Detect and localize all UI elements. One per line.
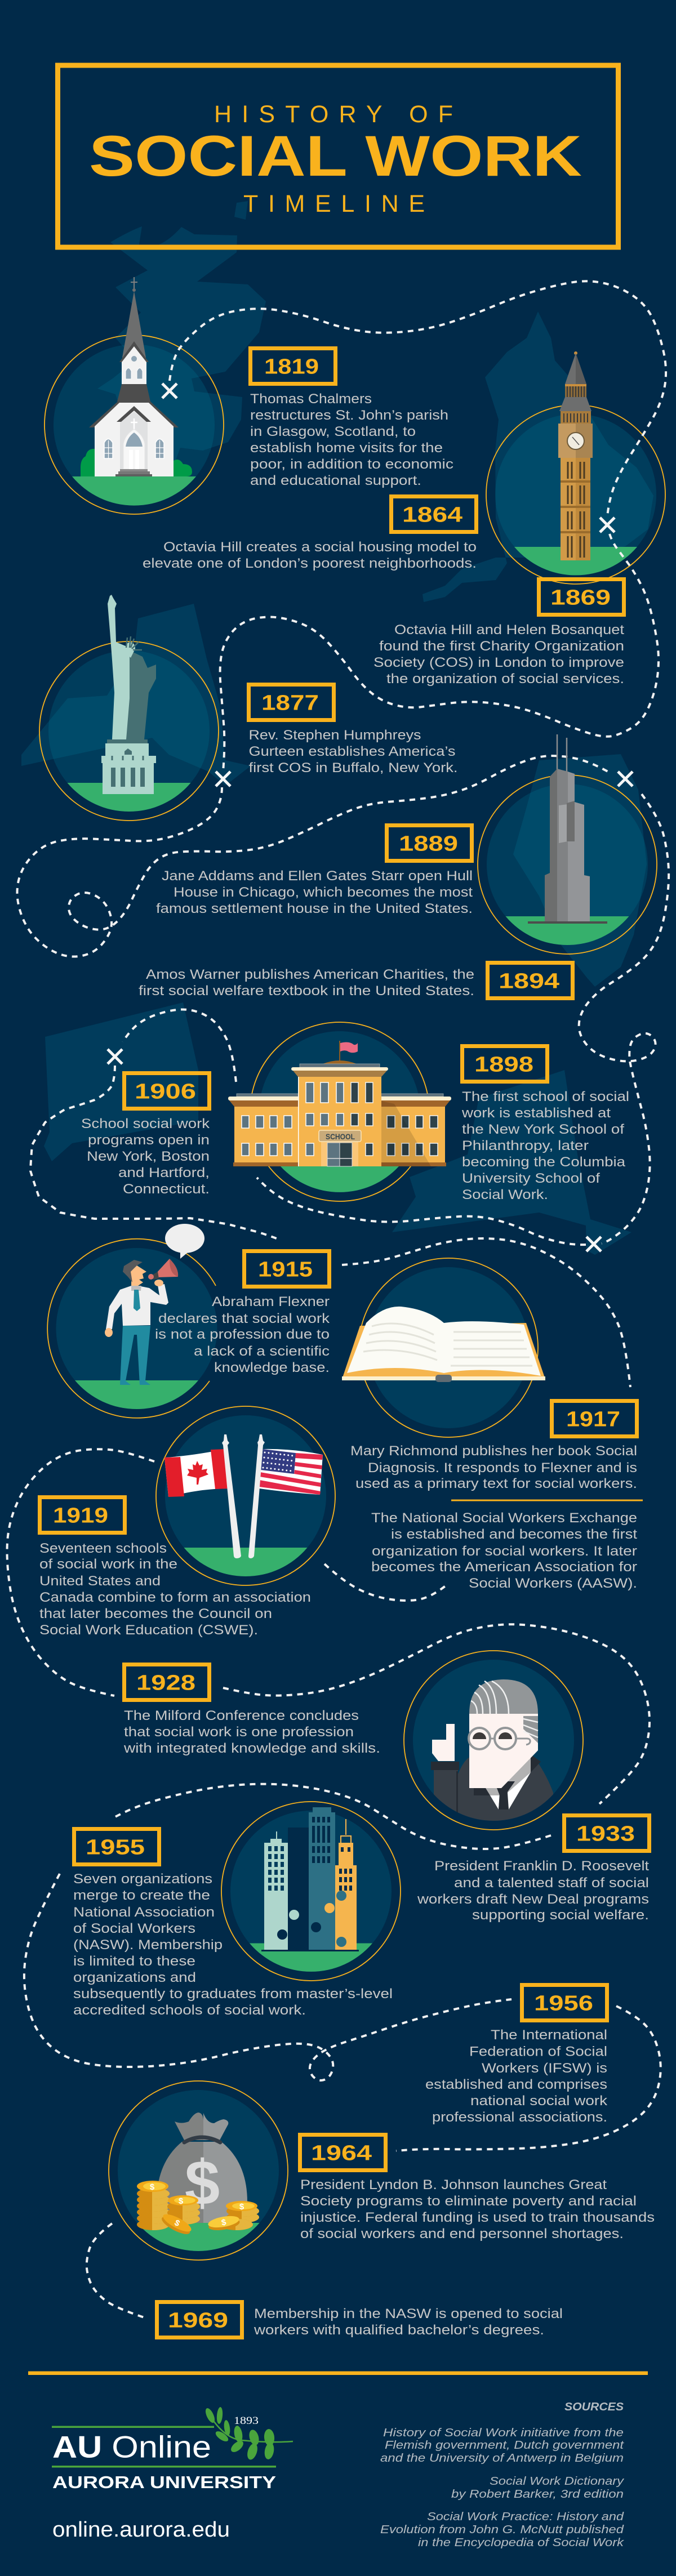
sources: and the University of Antwerp in Belgium <box>380 2452 624 2464</box>
icon: willis tower <box>528 734 607 924</box>
sources <box>380 2401 625 2549</box>
year badge 1928 <box>124 1665 210 1700</box>
year badge 1964 <box>300 2134 385 2171</box>
text 1955: is limited to these <box>73 1954 195 1969</box>
text 1819 <box>250 391 453 488</box>
title box: TIMELINE <box>243 190 425 217</box>
text 1933: and a talented staff of social <box>454 1875 649 1891</box>
text 1894: Amos Warner publishes American Charities, the <box>146 967 474 982</box>
text exchange: becomes the American Association for <box>371 1559 637 1575</box>
text 1915: is not a profession due to <box>155 1327 330 1342</box>
text 1928: The Milford Conference concludes <box>124 1708 359 1723</box>
year badge 1969 <box>157 2302 242 2337</box>
footer logo: 1893 <box>234 2415 259 2427</box>
text 1969: Membership in the NASW is opened to social <box>254 2306 563 2321</box>
icon: church <box>81 277 192 476</box>
text 1915: declares that social work <box>158 1311 330 1326</box>
year badge 1955: 1955 <box>86 1836 145 1860</box>
text 1869: the organization of social services. <box>386 671 624 687</box>
year badge 1889 <box>386 826 472 861</box>
year badge 1894: 1894 <box>499 970 559 993</box>
text 1898: the New York School of <box>462 1122 624 1137</box>
icon: man with megaphone <box>105 1224 204 1385</box>
text 1919: Social Work Education (CSWE). <box>39 1623 258 1638</box>
text 1819: in Glasgow, Scotland, to <box>250 424 416 439</box>
text 1915: knowledge base. <box>214 1360 330 1375</box>
text 1964: President Lyndon B. Johnson launches Great <box>300 2177 607 2192</box>
sources: Social Work Practice: History and <box>427 2511 624 2523</box>
footer logo: AU Online <box>52 2430 211 2464</box>
footer logo: AURORA UNIVERSITY <box>52 2472 276 2492</box>
timeline 1964 <box>300 2134 655 2241</box>
year badge 1864 <box>391 497 477 532</box>
text 1906: New York, Boston <box>87 1149 210 1164</box>
sources: Evolution from John G. McNutt published <box>380 2524 624 2536</box>
text 1894 <box>139 967 474 999</box>
text 1898: becoming the Columbia <box>462 1155 626 1170</box>
text 1877 <box>249 728 457 776</box>
footer logo <box>52 2407 293 2492</box>
text 1877: Rev. Stephen Humphreys <box>249 728 421 743</box>
year badge 1915 <box>244 1251 329 1286</box>
text 1877: first COS in Buffalo, New York. <box>249 760 457 776</box>
icon: money bag and coins <box>137 2113 259 2238</box>
sources: History of Social Work initiative from the <box>383 2427 624 2439</box>
text 1819: poor, in addition to economic <box>250 457 453 472</box>
title box: SOCIAL WORK <box>89 124 582 188</box>
text 1928 <box>123 1708 380 1756</box>
text 1969: workers with qualified bachelor’s degrees. <box>254 2323 544 2338</box>
year badge 1919: 1919 <box>53 1504 108 1527</box>
text 1933 <box>417 1859 649 1923</box>
text 1819: and educational support. <box>250 473 421 488</box>
timeline 1955 <box>73 1829 393 2018</box>
year badge 1917 <box>552 1401 637 1436</box>
year badge 1889: 1889 <box>399 832 458 856</box>
text 1956: Workers (IFSW) is <box>482 2061 607 2076</box>
icon: puzzle skyline <box>261 1807 359 1951</box>
divider 1917 <box>451 1499 643 1501</box>
text 1919: that later becomes the Council on <box>39 1606 272 1621</box>
text 1898: Philanthropy, later <box>462 1138 589 1153</box>
text 1955: accredited schools of social work. <box>73 2003 306 2018</box>
title box <box>57 65 619 247</box>
year badge 1928: 1928 <box>136 1672 195 1695</box>
text 1819: establish home visits for the <box>250 440 443 456</box>
timeline 1869 <box>373 579 624 687</box>
year badge 1906 <box>124 1073 210 1108</box>
text 1869: found the first Charity Organization <box>379 639 624 654</box>
text 1955: National Association <box>73 1905 215 1920</box>
text 1819: restructures St. John’s parish <box>250 408 448 423</box>
text 1898: Social Work. <box>462 1187 548 1202</box>
text 1898 <box>461 1089 629 1202</box>
sources: Flemish government, Dutch government <box>385 2439 625 2452</box>
text 1955: of Social Workers <box>73 1921 195 1936</box>
text 1819: Thomas Chalmers <box>250 391 372 407</box>
year badge 1869 <box>539 579 624 615</box>
year badge 1894 <box>488 963 572 998</box>
text 1955: merge to create the <box>73 1888 210 1903</box>
icon: school building <box>228 1041 451 1166</box>
year badge 1869: 1869 <box>550 586 611 609</box>
year badge 1898 <box>462 1046 548 1081</box>
year badge 1819 <box>250 348 336 384</box>
icon: school building: SCHOOL <box>326 1132 355 1141</box>
timeline 1917 <box>350 1401 643 1591</box>
text 1919: United States and <box>39 1574 161 1589</box>
icon: money bag and coins: $ <box>173 2218 181 2229</box>
year badge 1906: 1906 <box>135 1080 196 1104</box>
text 1928: with integrated knowledge and skills. <box>123 1741 380 1756</box>
icon: canadian and american flags <box>164 1434 323 1558</box>
text 1955: Seven organizations <box>73 1871 212 1887</box>
sources: by Robert Barker, 3rd edition <box>451 2488 624 2501</box>
year badge 1956 <box>522 1985 607 2021</box>
timeline 1919 <box>39 1497 311 1638</box>
text 1964 <box>300 2177 655 2241</box>
timeline 1889 <box>156 826 473 916</box>
year badge 1915: 1915 <box>258 1258 313 1282</box>
text 1956 <box>425 2027 608 2125</box>
year badge 1864: 1864 <box>402 503 462 527</box>
timeline 1864 <box>143 497 477 571</box>
text 1915: a lack of a scientific <box>194 1344 330 1359</box>
icon: money bag and coins: $ <box>150 2182 155 2192</box>
year badge 1898: 1898 <box>474 1053 533 1077</box>
panel: circle backdrops <box>39 335 665 2260</box>
text 1928: that social work is one profession <box>124 1724 354 1740</box>
text 1917: used as a primary text for social workers. <box>355 1476 637 1491</box>
text exchange: Social Workers (AASW). <box>469 1576 637 1591</box>
text 1889 <box>156 868 473 916</box>
text 1956: professional associations. <box>432 2110 607 2125</box>
text 1919: of social work in the <box>39 1557 177 1572</box>
text 1955 <box>73 1871 393 2018</box>
footer url: online.aurora.edu <box>52 2518 230 2542</box>
timeline 1877 <box>249 685 457 776</box>
text 1955: (NASW). Membership <box>73 1937 223 1953</box>
text 1919: Canada combine to form an association <box>39 1590 311 1605</box>
text 1933: workers draft New Deal programs <box>417 1892 649 1907</box>
text 1956: established and comprises <box>425 2077 607 2092</box>
text exchange: The National Social Workers Exchange <box>371 1510 637 1526</box>
icon: big ben <box>558 351 593 560</box>
text exchange: organization for social workers. It later <box>372 1544 637 1559</box>
timeline 1906 <box>81 1073 210 1197</box>
year badge 1969: 1969 <box>168 2309 228 2333</box>
text 1915 <box>155 1294 330 1375</box>
dashed route <box>7 281 669 2317</box>
year badge 1933: 1933 <box>576 1822 635 1846</box>
text 1964: of social workers and end personnel shortages. <box>300 2226 624 2241</box>
text 1898: work is established at <box>461 1106 611 1121</box>
text 1906: and Hartford, <box>118 1165 210 1180</box>
timeline 1928 <box>123 1665 380 1756</box>
text 1917 <box>350 1443 637 1491</box>
icon: money bag and coins: $ <box>239 2202 244 2212</box>
text 1869: Society (COS) in London to improve <box>373 655 624 670</box>
sources: in the Encyclopedia of Social Work <box>418 2537 624 2549</box>
timeline 1915 <box>155 1251 330 1375</box>
text exchange <box>371 1510 637 1591</box>
icon: statue of liberty <box>101 595 156 794</box>
timeline 1969 <box>157 2302 563 2338</box>
text 1964: Society programs to eliminate poverty and racial <box>300 2194 637 2209</box>
text 1898: University School of <box>462 1171 600 1186</box>
text 1956: The International <box>491 2027 607 2043</box>
text 1894: first social welfare textbook in the United States. <box>139 983 474 999</box>
text 1933: supporting social welfare. <box>472 1908 649 1923</box>
year badge 1956: 1956 <box>534 1991 593 2015</box>
text 1869 <box>373 622 624 687</box>
text 1917: Mary Richmond publishes her book Social <box>350 1443 637 1459</box>
text 1877: Gurteen establishes America’s <box>249 744 455 759</box>
text 1955: organizations and <box>73 1970 196 1985</box>
timeline 1933 <box>417 1816 649 1923</box>
timeline 1898 <box>461 1046 629 1202</box>
icon: money bag and coins: $ <box>179 2196 184 2206</box>
text 1919: Seventeen schools <box>39 1541 167 1556</box>
text 1889: House in Chicago, which becomes the most <box>174 885 473 900</box>
year badge 1955 <box>74 1829 159 1864</box>
text 1869: Octavia Hill and Helen Bosanquet <box>394 622 624 638</box>
year badge 1917: 1917 <box>566 1408 620 1432</box>
text 1915: Abraham Flexner <box>212 1294 330 1309</box>
text 1956: national social work <box>470 2093 608 2109</box>
background maps <box>21 201 653 1255</box>
year badge 1919 <box>39 1497 125 1533</box>
sources: Social Work Dictionary <box>490 2475 624 2488</box>
text 1864: Octavia Hill creates a social housing model to <box>163 540 477 555</box>
text 1906 <box>81 1116 210 1197</box>
timeline 1956 <box>425 1985 608 2125</box>
title box: HISTORY OF <box>214 101 453 128</box>
year badge 1877: 1877 <box>261 692 319 715</box>
text 1969 <box>254 2306 563 2338</box>
timeline 1819 <box>250 348 453 488</box>
text 1955: subsequently to graduates from master’s-level <box>73 1986 393 2002</box>
text 1889: Jane Addams and Ellen Gates Starr open Hull <box>162 868 473 884</box>
year badge 1877 <box>249 685 333 720</box>
icon: open book <box>342 1307 545 1382</box>
icon: money bag and coins: $ <box>185 2147 220 2218</box>
text 1906: programs open in <box>88 1133 210 1148</box>
text 1919 <box>39 1541 311 1638</box>
timeline 1894 <box>139 963 572 999</box>
icon: roosevelt portrait <box>431 1679 553 1830</box>
text 1864 <box>143 540 477 571</box>
text 1864: elevate one of London’s poorest neighborhoods. <box>143 556 477 571</box>
text 1889: famous settlement house in the United States. <box>156 901 473 916</box>
text 1906: Connecticut. <box>123 1182 210 1197</box>
year badge 1964: 1964 <box>311 2141 372 2165</box>
text 1964: injustice. Federal funding is used to train thousands <box>300 2210 655 2225</box>
text 1956: Federation of Social <box>469 2044 607 2059</box>
year badge 1933 <box>564 1816 649 1851</box>
sources: SOURCES <box>564 2401 624 2413</box>
x markers on route <box>108 384 633 1251</box>
text 1898: The first school of social <box>462 1089 629 1104</box>
text 1917: Diagnosis. It responds to Flexner and is <box>368 1460 637 1476</box>
icon: money bag and coins: $ <box>221 2217 227 2228</box>
text 1906: School social work <box>81 1116 210 1131</box>
year badge 1819: 1819 <box>264 355 319 378</box>
text 1933: President Franklin D. Roosevelt <box>434 1859 649 1874</box>
text exchange: is established and becomes the first <box>391 1527 637 1542</box>
